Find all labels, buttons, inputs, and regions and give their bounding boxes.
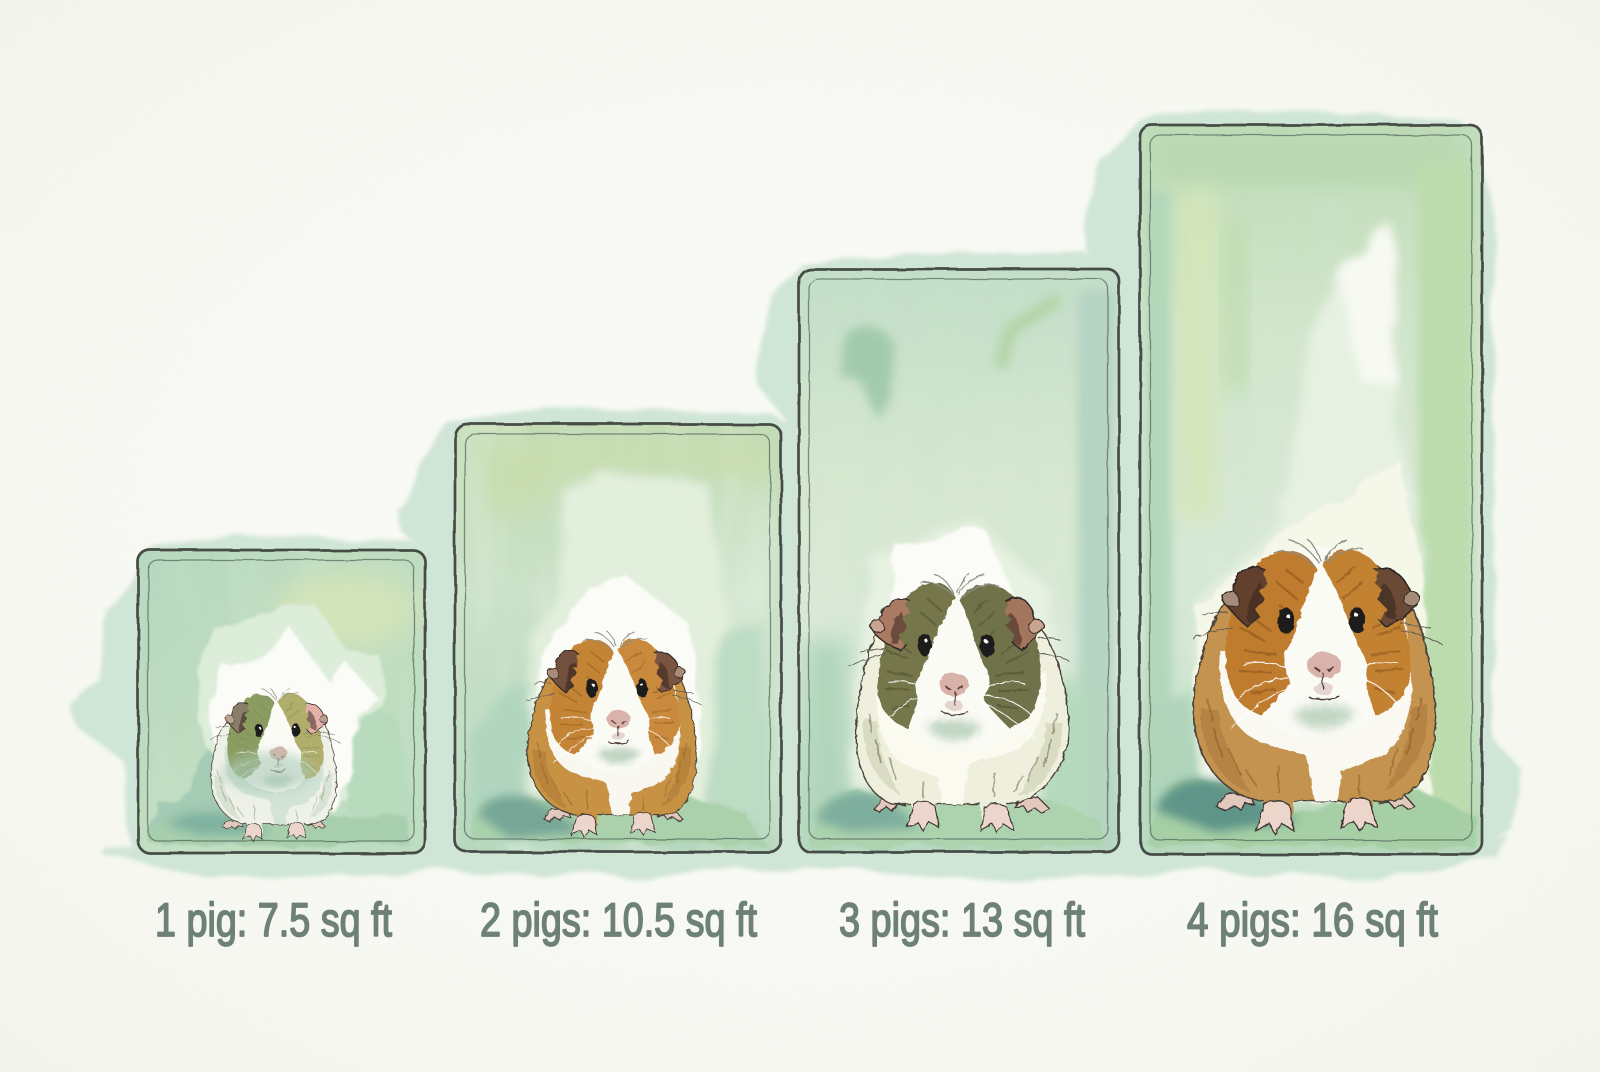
box frame — [799, 269, 1119, 852]
guinea pig 3 — [849, 573, 1069, 833]
panel: 2 pigs enclosure — [455, 424, 781, 852]
wash: outer stain 2 — [398, 408, 800, 868]
box interior wash — [799, 269, 1119, 852]
guinea pig 1 — [210, 688, 340, 841]
wash: outer stain 3 — [756, 252, 1140, 870]
wash: outer stain 1 — [72, 538, 445, 874]
guinea pig 4 — [1193, 539, 1443, 834]
box frame — [138, 550, 425, 853]
watercolour stains behind the boxes — [72, 110, 1522, 880]
box frame — [1140, 125, 1482, 854]
wash: ground band — [100, 838, 1510, 880]
box frame — [455, 424, 781, 852]
panel: 1 pig enclosure — [138, 550, 425, 853]
pig 1 chest shading — [222, 752, 314, 792]
label: 3 pigs: 3 pigs: 13 sq ft — [839, 893, 1085, 946]
panel: 4 pigs enclosure — [1140, 125, 1482, 854]
box interior wash — [138, 550, 425, 853]
guinea pig 2 — [527, 631, 702, 838]
label: 2 pigs: 2 pigs: 10.5 sq ft — [480, 893, 757, 946]
label: 4 pigs: 4 pigs: 16 sq ft — [1187, 893, 1438, 946]
box interior wash — [1140, 125, 1482, 854]
wash: outer stain 4 — [1082, 110, 1522, 872]
label: 1 pig: 1 pig: 7.5 sq ft — [155, 893, 392, 946]
box interior wash — [455, 424, 781, 852]
panel: 3 pigs enclosure — [799, 269, 1119, 852]
